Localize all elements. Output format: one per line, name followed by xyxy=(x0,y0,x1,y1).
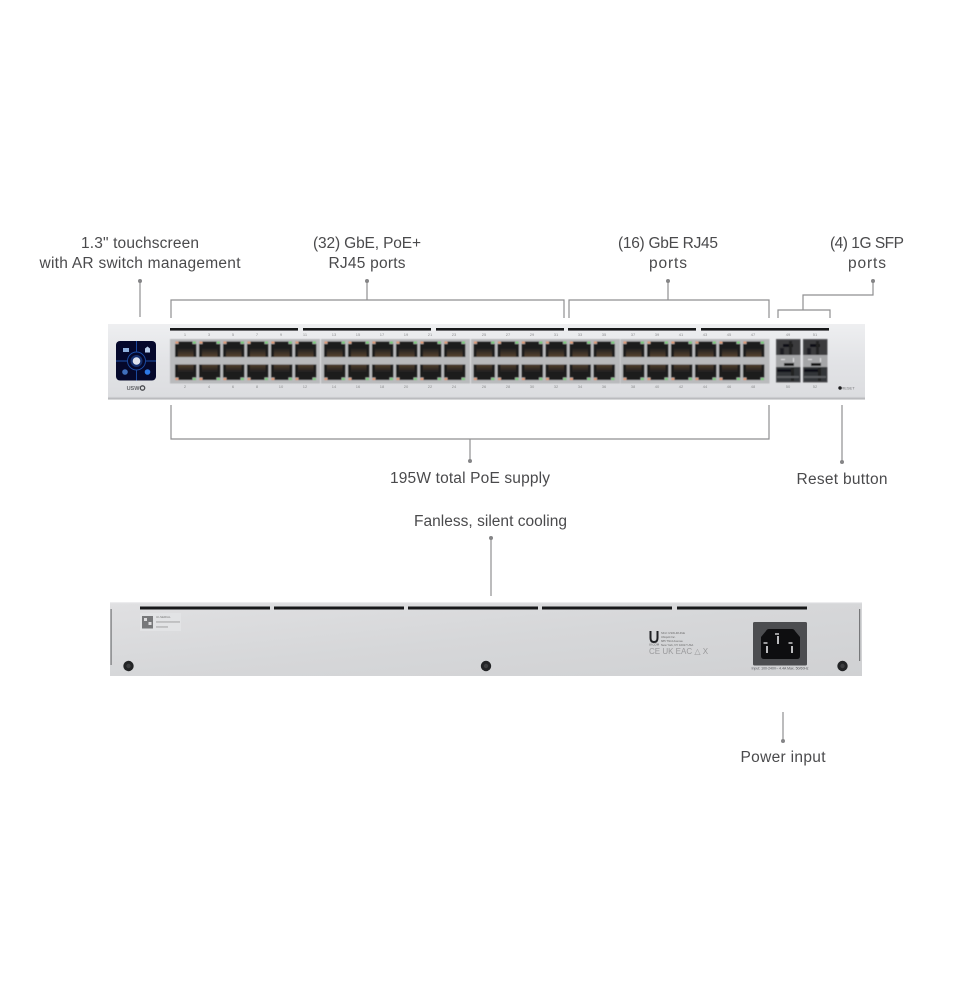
icon: QR serial label: XXXXXXXXXXXX xyxy=(156,620,180,624)
labels: even port numbers: 32 xyxy=(554,384,559,389)
labels: even port numbers: 2 xyxy=(184,384,187,389)
labels: odd port numbers: 47 xyxy=(751,332,756,337)
text: PoE supply label: 195W total PoE supply xyxy=(390,470,550,487)
labels: even port numbers: 18 xyxy=(380,384,385,389)
labels: even port numbers: 22 xyxy=(428,384,433,389)
icon: reset button: RESET xyxy=(841,386,855,390)
labels: odd port numbers: 1 xyxy=(184,332,187,337)
heading: SFP ports label: ports xyxy=(848,255,886,272)
labels: even port numbers: 10 xyxy=(279,384,284,389)
labels: odd port numbers: 31 xyxy=(554,332,559,337)
arrow: touchscreen leader xyxy=(138,279,142,317)
labels: even port numbers: 24 xyxy=(452,384,457,389)
labels: odd port numbers: 49 xyxy=(786,332,791,337)
text: power label: Power input xyxy=(740,749,826,766)
labels: even port numbers: 50 xyxy=(786,384,791,389)
labels: odd port numbers: 13 xyxy=(332,332,337,337)
icon: brand and regulatory marks: New York, NY 10017 USA xyxy=(661,643,693,647)
labels: odd port numbers: 41 xyxy=(679,332,684,337)
heading: touchscreen label xyxy=(38,235,241,272)
labels: even port numbers: 8 xyxy=(256,384,259,389)
arrow: SFP bracket xyxy=(778,279,875,318)
heading: touchscreen label: with AR switch management xyxy=(38,255,241,272)
icon: brand and regulatory marks: 685 Third Avenue xyxy=(661,639,683,643)
icon: touchscreen xyxy=(116,341,156,380)
labels: odd port numbers: 37 xyxy=(631,332,636,337)
labels: even port numbers: 12 xyxy=(303,384,308,389)
arrow: power leader xyxy=(781,712,785,743)
labels: odd port numbers: 39 xyxy=(655,332,660,337)
arrow: GbE bracket xyxy=(569,279,769,318)
heading: touchscreen label: 1.3" touchscreen xyxy=(81,235,199,252)
labels: even port numbers: 28 xyxy=(506,384,511,389)
labels: even port numbers: 14 xyxy=(332,384,337,389)
arrow: PoE+ bracket xyxy=(171,279,564,318)
labels: even port numbers: 38 xyxy=(631,384,636,389)
icon: brand and regulatory marks: Ubiquiti Inc. xyxy=(661,635,676,639)
panel: front of switch xyxy=(108,324,865,400)
labels: even port numbers: 48 xyxy=(751,384,756,389)
labels: odd port numbers: 17 xyxy=(380,332,385,337)
heading: PoE+ ports label: (32) GbE, PoE+ xyxy=(313,235,421,252)
labels: odd port numbers: 21 xyxy=(428,332,433,337)
panel: rear of switch xyxy=(110,602,862,676)
icon: QR serial label: XXXXXX xyxy=(156,625,168,629)
labels: odd port numbers: 11 xyxy=(303,332,308,337)
icon: QR serial label: UI-SERIAL xyxy=(156,615,171,619)
panel: SFP ports xyxy=(776,339,828,382)
panel: RJ45 port block xyxy=(170,339,770,384)
labels: odd port numbers: 23 xyxy=(452,332,457,337)
labels: odd port numbers: 35 xyxy=(602,332,607,337)
labels: even port numbers: 26 xyxy=(482,384,487,389)
heading: PoE+ ports label: RJ45 ports xyxy=(328,255,406,272)
labels: even port numbers: 42 xyxy=(679,384,684,389)
labels: odd port numbers: 27 xyxy=(506,332,511,337)
labels: odd port numbers xyxy=(184,332,818,337)
arrow: cooling leader xyxy=(489,536,493,596)
text: cooling label: Fanless, silent cooling xyxy=(414,513,567,530)
labels: odd port numbers: 7 xyxy=(256,332,259,337)
labels: odd port numbers: 15 xyxy=(356,332,361,337)
labels: odd port numbers: 19 xyxy=(404,332,409,337)
logo: USW model mark: USW xyxy=(127,386,140,392)
vents: front top slots xyxy=(170,328,829,331)
labels: even port numbers: 40 xyxy=(655,384,660,389)
labels: odd port numbers: 43 xyxy=(703,332,708,337)
labels: even port numbers: 34 xyxy=(578,384,583,389)
labels: odd port numbers: 9 xyxy=(280,332,283,337)
icon: brand and regulatory marks xyxy=(649,631,709,656)
arrow: reset leader xyxy=(840,405,844,464)
icon: brand and regulatory marks: SKU: USW-48-PoE xyxy=(661,631,685,635)
labels: even port numbers: 44 xyxy=(703,384,708,389)
labels: odd port numbers: 25 xyxy=(482,332,487,337)
logo: USW model mark xyxy=(127,386,145,392)
heading: GbE RJ45 ports label: ports xyxy=(649,255,687,272)
labels: odd port numbers: 51 xyxy=(813,332,818,337)
labels: even port numbers: 6 xyxy=(232,384,235,389)
icon: QR serial label xyxy=(140,613,181,631)
labels: even port numbers: 16 xyxy=(356,384,361,389)
labels: even port numbers: 52 xyxy=(813,384,818,389)
labels: odd port numbers: 45 xyxy=(727,332,732,337)
icon: screws xyxy=(123,661,848,671)
icon: brand and regulatory marks: UI.COM xyxy=(649,642,660,646)
icon: power inlet xyxy=(753,622,807,666)
labels: odd port numbers: 29 xyxy=(530,332,535,337)
heading: SFP ports label xyxy=(830,235,904,272)
labels: even port numbers xyxy=(184,384,818,389)
heading: GbE RJ45 ports label: (16) GbE RJ45 xyxy=(618,235,718,252)
text: reset label: Reset button xyxy=(796,471,888,488)
heading: PoE+ ports label xyxy=(313,235,421,272)
labels: even port numbers: 30 xyxy=(530,384,535,389)
labels: even port numbers: 36 xyxy=(602,384,607,389)
labels: odd port numbers: 3 xyxy=(208,332,211,337)
labels: even port numbers: 4 xyxy=(208,384,211,389)
text: power rating: Input: 100-240V~ 4.4A Max. 50/60Hz xyxy=(752,666,809,670)
heading: SFP ports label: (4) 1G SFP xyxy=(830,235,904,252)
arrow: PoE supply bracket xyxy=(171,405,769,463)
icon: brand and regulatory marks: CE UK EAC △ X xyxy=(649,647,709,656)
labels: even port numbers: 20 xyxy=(404,384,409,389)
labels: odd port numbers: 5 xyxy=(232,332,235,337)
heading: GbE RJ45 ports label xyxy=(618,235,718,272)
labels: even port numbers: 46 xyxy=(727,384,732,389)
labels: odd port numbers: 33 xyxy=(578,332,583,337)
vents: rear top slots xyxy=(140,606,807,610)
